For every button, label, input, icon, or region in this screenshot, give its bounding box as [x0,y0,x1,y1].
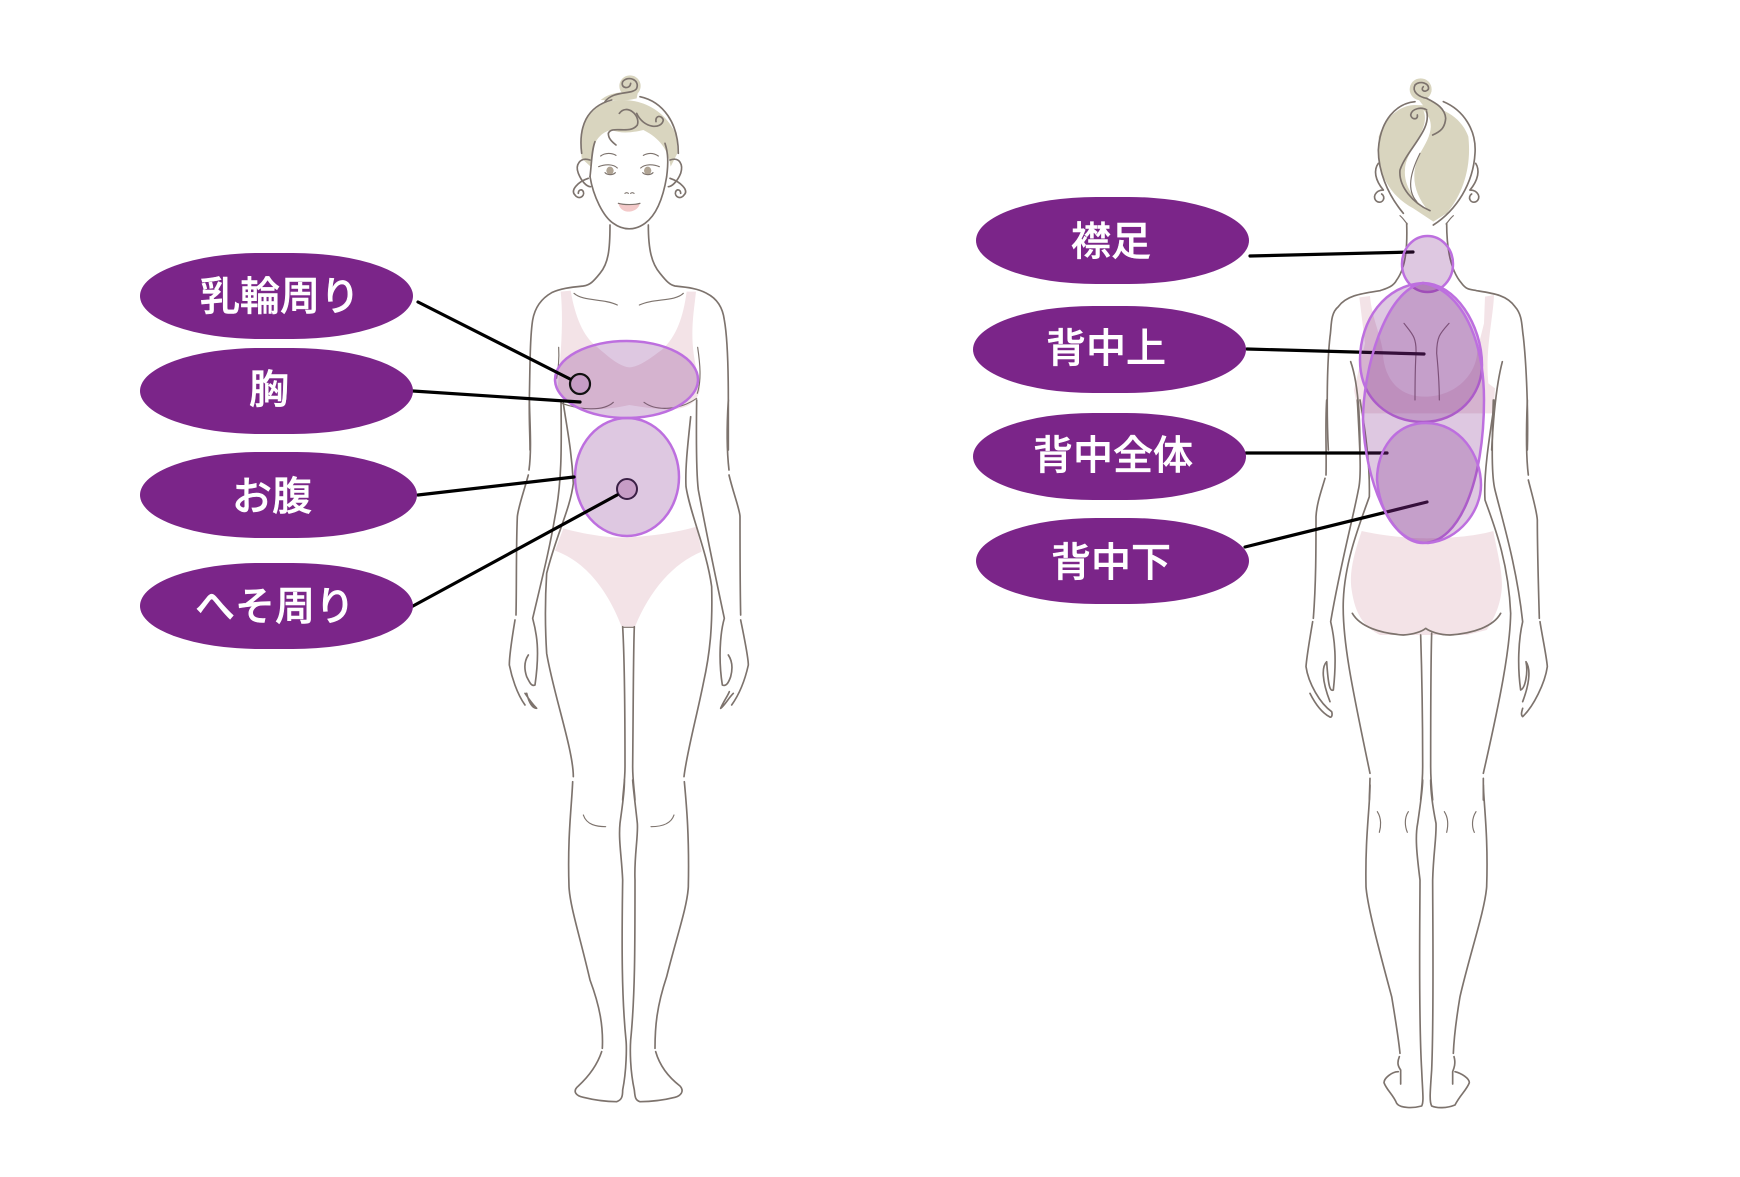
label: 乳輪周り [140,253,413,339]
label: 背中上: 背中上 [1046,327,1166,371]
back legs and feet [1366,780,1487,1108]
front panties [555,527,702,627]
leader lines to front areas [413,302,617,606]
label: 襟足: 襟足 [1071,220,1151,264]
back bra [1354,295,1495,413]
label: へそ周り: へそ周り [195,585,355,629]
label: 襟足 [976,197,1249,284]
label: 乳輪周り: 乳輪周り [200,275,360,319]
label: 背中全体 [973,413,1246,500]
front torso and arms [509,400,748,800]
highlighted area: lower back [1377,423,1481,543]
back body illustration [1306,78,1547,1108]
label: へそ周り [140,563,413,649]
highlighted area: belly [575,418,679,536]
label: 背中全体: 背中全体 [1033,434,1193,478]
front face [574,153,686,229]
back neck shoulders and arms upper [1327,223,1528,450]
back hair [1375,78,1479,225]
label: 背中上 [973,306,1246,393]
highlighted area: upper back [1360,283,1482,422]
back panties [1351,531,1502,635]
front neck shoulders and arms upper [529,225,728,450]
label: お腹: お腹 [232,475,312,519]
nipple area marker [570,374,590,394]
navel marker [617,479,637,499]
leader lines behind back areas [1245,252,1427,547]
label: 胸: 胸 [249,368,289,412]
label: 背中下: 背中下 [1051,541,1171,585]
label: 背中下 [976,518,1249,604]
highlighted area: nape [1402,236,1453,292]
highlighted area: chest [555,341,698,418]
label: お腹 [140,452,417,538]
front body illustration [509,75,748,1102]
label: 胸 [140,348,413,434]
front hair [581,75,678,177]
highlighted area: whole back [1363,283,1484,543]
back torso and arms [1306,400,1547,800]
front legs and feet [569,780,689,1102]
front bra [557,291,700,409]
